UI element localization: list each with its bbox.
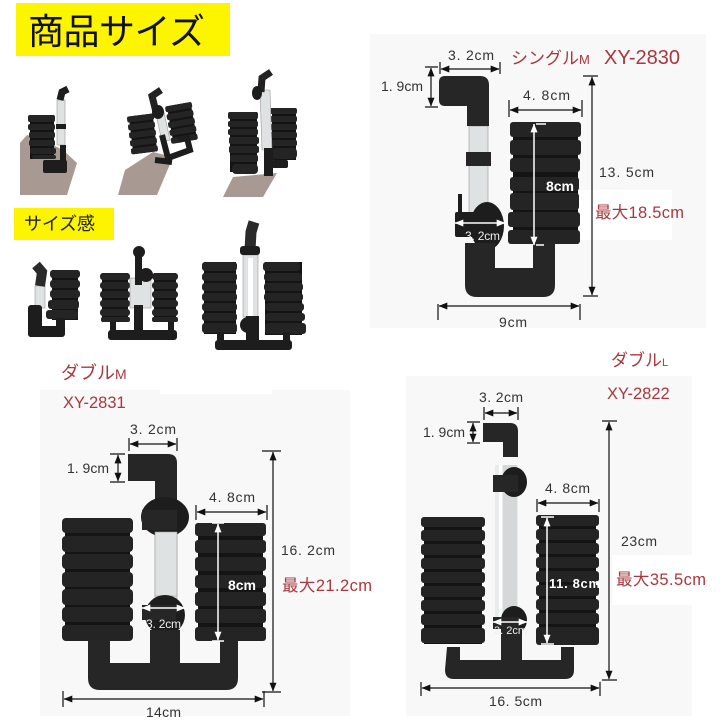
dimension: base width 3.2cm: 3. 2cm: [494, 625, 527, 637]
model number: XY-2831: [63, 394, 126, 412]
dimension: total height 16.2cm: 16. 2cm: [281, 542, 335, 558]
dimension: tube width 3.2cm: 3. 2cm: [130, 421, 176, 437]
dimension: tube width 3.2cm: 3. 2cm: [479, 389, 523, 405]
model number: XY-2822: [607, 385, 670, 403]
dimension: sponge width 4.8cm: 4. 8cm: [545, 480, 590, 496]
model label: XY-2830: [604, 47, 680, 69]
dimension: total height 23cm: 23cm: [621, 533, 657, 549]
product: single sponge filter: [439, 76, 581, 297]
model label: ダブルL: [611, 350, 668, 370]
dimension: elbow height 1.9cm: 1. 9cm: [423, 424, 465, 440]
product: large double sponge filter: [421, 423, 599, 679]
dimension: tube width 3.2cm: [440, 47, 500, 74]
heading: product size: [16, 3, 230, 56]
dimension: base width 9cm: [438, 304, 580, 330]
dimension: total height 13.5cm: [583, 76, 654, 296]
photo: large double filter held in hand: [223, 72, 297, 197]
photo: single filter held in hand: [20, 89, 77, 195]
dimension: total height 16.2cm: [262, 451, 335, 692]
dimension: sponge width 4.8cm: 4. 8cm: [209, 489, 255, 505]
dimension: base width 3.2cm: [455, 223, 505, 243]
product: medium double sponge filter: [62, 454, 266, 690]
dimension: base width 3.2cm: 3. 2cm: [146, 617, 181, 631]
max height label: 最大18.5cm: [595, 203, 684, 222]
dimension: elbow height 1.9cm: [67, 454, 125, 482]
dimension: base width 14cm: 14cm: [146, 704, 181, 720]
max height label: 最大35.5cm: [616, 570, 706, 589]
panel: double L XY-2822: [406, 350, 706, 716]
max height label: 最大21.2cm: [282, 576, 372, 595]
dimension: tube width 3.2cm: 3. 2cm: [448, 47, 494, 63]
model label: ダブルM: [61, 362, 127, 383]
dimension: base width 14cm: [63, 691, 264, 720]
panel: single M XY-2830: [370, 34, 706, 330]
model label: シングルM: [511, 49, 590, 68]
dimension: elbow height 1.9cm: [381, 67, 438, 107]
dimension: elbow height 1.9cm: 1. 9cm: [381, 78, 423, 94]
dimension: tube width 3.2cm: [479, 389, 523, 420]
dimension: tube width 3.2cm: [129, 421, 177, 451]
dimension: base width 16.5cm: [421, 682, 600, 709]
dimension: base width 3.2cm: [142, 608, 185, 631]
dimension: sponge height 8cm: 8cm: [228, 577, 256, 593]
dimension: sponge height 8cm: 8cm: [546, 178, 574, 194]
dimension: sponge width 4.8cm: [509, 87, 582, 117]
photo: medium double filter: [100, 246, 178, 340]
label: size comparison: [14, 208, 114, 240]
dimension: total height 23cm: [602, 421, 657, 680]
dimension: sponge width 4.8cm: [196, 489, 267, 520]
photo: large double filter: [202, 222, 306, 350]
photo: double filter held in hand: [118, 90, 198, 195]
photo: small filter: [28, 265, 80, 337]
dimension: base width 16.5cm: 16. 5cm: [489, 693, 542, 709]
panel: double M XY-2831: [40, 362, 372, 720]
dimension: base width 3.2cm: 3. 2cm: [465, 229, 500, 243]
dimension: total height 13.5cm: 13. 5cm: [599, 164, 654, 180]
dimension: sponge height 8cm: [212, 523, 256, 641]
dimension: sponge height 11.8cm: [541, 517, 600, 644]
dimension: sponge width 4.8cm: 4. 8cm: [523, 87, 570, 103]
dimension: base width 9cm: 9cm: [499, 314, 527, 330]
dimension: elbow height 1.9cm: [423, 422, 480, 443]
dimension: sponge width 4.8cm: [537, 480, 599, 512]
dimension: elbow height 1.9cm: 1. 9cm: [67, 460, 109, 476]
dimension: sponge height 11.8cm: 11. 8cm: [549, 576, 600, 591]
heading: product size: 商品サイズ: [28, 11, 205, 52]
label: size comparison: サイズ感: [24, 214, 95, 234]
dimension: sponge height 8cm: [534, 124, 574, 245]
